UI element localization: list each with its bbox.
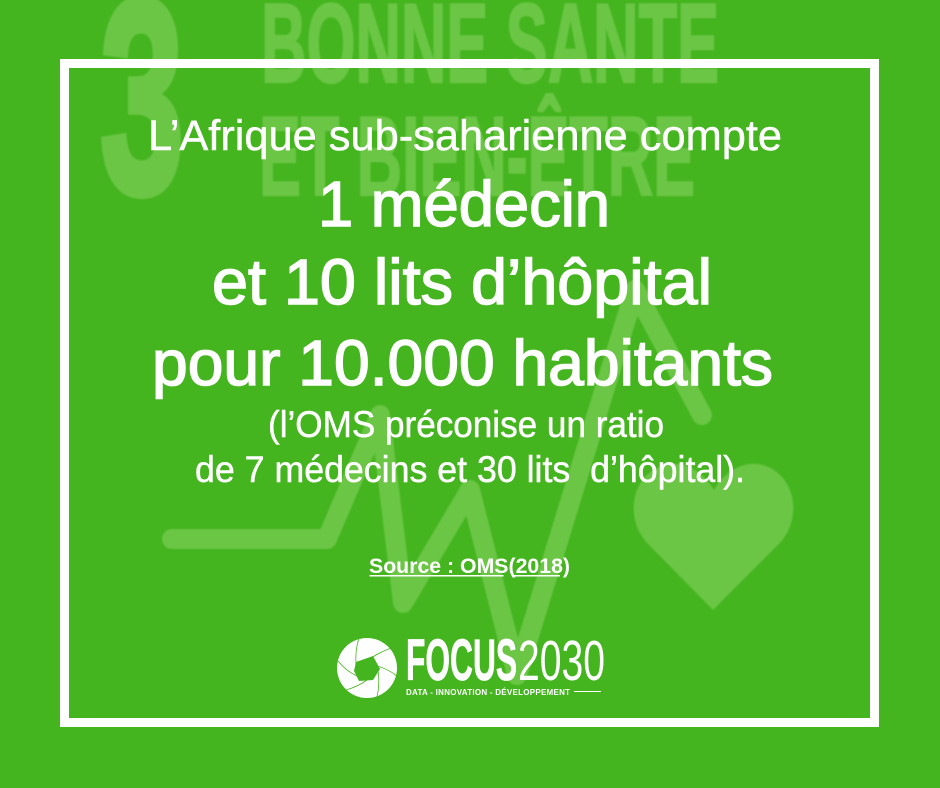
key figure: doctors: 1 médecin bbox=[318, 168, 610, 240]
intro line: L’Afrique sub-saharienne compte bbox=[148, 112, 782, 160]
key figure: population: pour 10.000 habitants bbox=[152, 327, 773, 399]
logo tagline: DATA - INNOVATION - DÉVELOPPEMENT bbox=[406, 688, 570, 697]
background icon: heartbeat line bbox=[172, 290, 702, 675]
logo: Focus 2030 bbox=[337, 628, 605, 698]
logo wordmark: FOCUS: FOCUS bbox=[406, 628, 517, 693]
tagline rule bbox=[574, 691, 601, 692]
logo wordmark: 2030: 2030 bbox=[518, 629, 605, 693]
WHO recommendation line 1: (l’OMS préconise un ratio bbox=[268, 404, 664, 445]
main text block bbox=[148, 112, 782, 578]
white frame bbox=[64, 64, 874, 722]
background icon: heart bbox=[634, 464, 793, 610]
logo icon: camera aperture bbox=[337, 638, 397, 698]
WHO recommendation line 2: de 7 médecins et 30 lits d’hôpital). bbox=[195, 449, 745, 490]
background watermark bbox=[100, 0, 793, 675]
source: Source : OMS(2018) bbox=[369, 555, 570, 578]
key figure: hospital beds: et 10 lits d’hôpital bbox=[212, 246, 712, 318]
